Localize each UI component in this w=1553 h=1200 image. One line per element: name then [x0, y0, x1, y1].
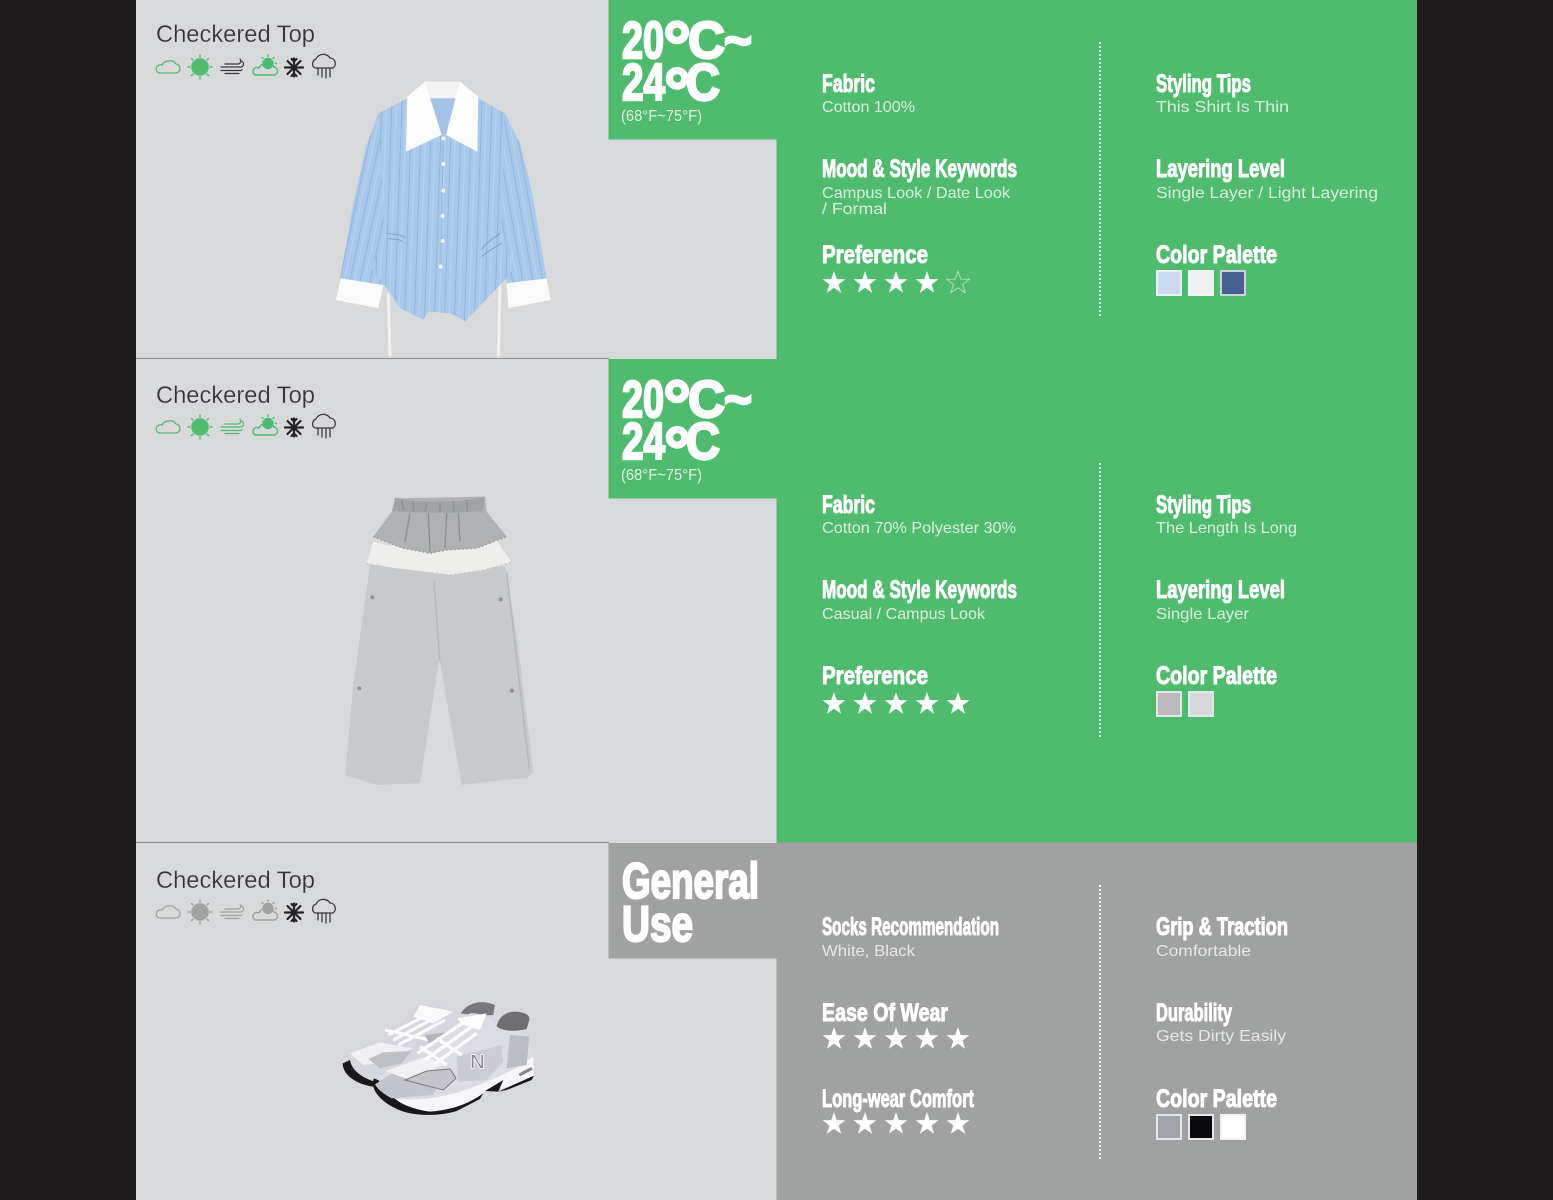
ease of wear rating	[822, 999, 969, 1049]
icon: rain cloud	[313, 54, 335, 78]
fabric	[822, 70, 915, 116]
color palette: Color Palette	[1156, 1085, 1277, 1113]
styling tips	[1156, 491, 1297, 537]
color palette: Color Palette	[1156, 662, 1277, 690]
temperature block: pants: (68°F~75°F)	[621, 467, 702, 484]
temperature block: shirt: (68°F~75°F)	[621, 108, 702, 125]
illustration: sneakers: N	[470, 1050, 485, 1073]
color palette	[1156, 241, 1277, 295]
icon: cloud	[156, 906, 180, 918]
layering level: Single Layer / Light Layering	[1156, 185, 1378, 202]
durability	[1156, 999, 1286, 1045]
socks recommendation: Socks Recommendation	[822, 913, 999, 941]
mood and style keywords: / Formal	[822, 201, 887, 218]
icon: partly cloudy	[253, 55, 278, 75]
color palette: Color Palette	[1156, 241, 1277, 269]
mood and style keywords: Mood & Style Keywords	[822, 576, 1017, 604]
mood and style keywords	[822, 155, 1017, 218]
icon: snow	[285, 58, 303, 76]
icon: sun	[188, 55, 212, 79]
icon: rain cloud	[313, 899, 335, 923]
title: pants: Checkered Top	[156, 382, 315, 409]
icon: rain cloud	[313, 414, 335, 438]
icons: weather row 1	[156, 54, 335, 79]
mood and style keywords	[822, 576, 1017, 623]
fabric: Fabric	[822, 491, 875, 519]
heading block: general use: General	[622, 853, 759, 909]
durability: Durability	[1156, 999, 1232, 1027]
layering level	[1156, 576, 1285, 623]
icons: weather row 2	[156, 414, 335, 439]
icon: partly cloudy	[253, 415, 278, 435]
temperature block: shirt: C	[686, 54, 720, 112]
temperature block: pants: C	[688, 371, 725, 429]
back shoe	[343, 1000, 503, 1087]
icon: sun	[188, 415, 212, 439]
section: pants	[156, 366, 1297, 785]
details: sneakers	[822, 885, 1288, 1161]
preference rating	[822, 662, 969, 714]
long-wear comfort rating: Long-wear Comfort	[822, 1085, 974, 1113]
temperature block: pants: C	[686, 413, 720, 471]
icon: snow	[285, 418, 303, 436]
color palette	[1156, 1085, 1277, 1139]
mood and style keywords: Campus Look / Date Look	[822, 185, 1011, 202]
styling tips: The Length Is Long	[1156, 520, 1297, 537]
temperature block: pants: °	[664, 413, 690, 487]
icon: wind	[221, 904, 244, 918]
grip and traction: Comfortable	[1156, 943, 1251, 960]
section: sneakers	[156, 853, 1288, 1161]
icon: snow	[285, 904, 303, 922]
grip and traction: Grip & Traction	[1156, 913, 1288, 941]
temperature block: shirt: °	[664, 54, 690, 128]
ease of wear rating: Ease Of Wear	[822, 999, 948, 1027]
front shoe	[373, 1012, 533, 1115]
icon: sun	[188, 900, 212, 924]
temperature block: pants: 20	[622, 371, 664, 429]
temperature block: shirt: C	[688, 12, 725, 70]
socks recommendation: White, Black	[822, 943, 916, 960]
section: shirt	[156, 7, 1378, 357]
layering level: Single Layer	[1156, 606, 1250, 623]
details: pants	[822, 463, 1297, 739]
heading block: general use: Use	[622, 896, 693, 952]
icon: wind	[221, 59, 244, 74]
temperature block: pants: ~	[724, 371, 752, 429]
temperature block: shirt: 24	[622, 54, 665, 112]
grip and traction	[1156, 913, 1288, 960]
details: shirt	[822, 42, 1378, 318]
fabric: Fabric	[822, 70, 875, 98]
illustration: striped shirt	[336, 82, 551, 357]
panel: left product column	[136, 0, 777, 1200]
socks recommendation	[822, 913, 999, 960]
temperature block: shirt	[621, 7, 752, 128]
icon: partly cloudy	[253, 900, 278, 920]
title: sneakers: Checkered Top	[156, 867, 315, 894]
temperature block: shirt: 20	[622, 12, 664, 70]
fabric: Cotton 100%	[822, 99, 915, 116]
layering level: Layering Level	[1156, 576, 1285, 604]
styling tips: Styling Tips	[1156, 491, 1251, 519]
preference rating: Preference	[822, 662, 928, 690]
heading block: general use	[622, 853, 759, 952]
temperature block: shirt: ~	[724, 12, 752, 70]
illustration: sneakers	[343, 1000, 534, 1115]
panel: green temperature background	[608, 0, 1417, 843]
panel: gray general use background	[608, 842, 1417, 1200]
temperature block: shirt: °	[663, 7, 691, 85]
temperature block: pants: °	[663, 366, 691, 444]
styling tips: Styling Tips	[1156, 70, 1251, 98]
styling tips	[1156, 70, 1289, 116]
styling tips: This Shirt Is Thin	[1156, 99, 1289, 116]
icon: cloud	[156, 61, 180, 73]
temperature block: pants: 24	[622, 413, 665, 471]
temperature block: pants	[621, 366, 752, 487]
fabric: Cotton 70% Polyester 30%	[822, 520, 1016, 537]
mood and style keywords: Casual / Campus Look	[822, 606, 986, 623]
title: shirt: Checkered Top	[156, 21, 315, 48]
durability: Gets Dirty Easily	[1156, 1028, 1286, 1045]
layering level: Layering Level	[1156, 155, 1285, 183]
preference rating	[822, 241, 969, 293]
layering level	[1156, 155, 1378, 202]
icons: weather row 3	[156, 899, 335, 924]
illustration: gray ruffled pants	[345, 497, 533, 785]
preference rating: Preference	[822, 241, 928, 269]
color palette	[1156, 662, 1277, 716]
icon: cloud	[156, 421, 180, 433]
fabric	[822, 491, 1016, 537]
mood and style keywords: Mood & Style Keywords	[822, 155, 1017, 183]
icon: wind	[221, 419, 244, 434]
long-wear comfort rating	[822, 1085, 974, 1134]
